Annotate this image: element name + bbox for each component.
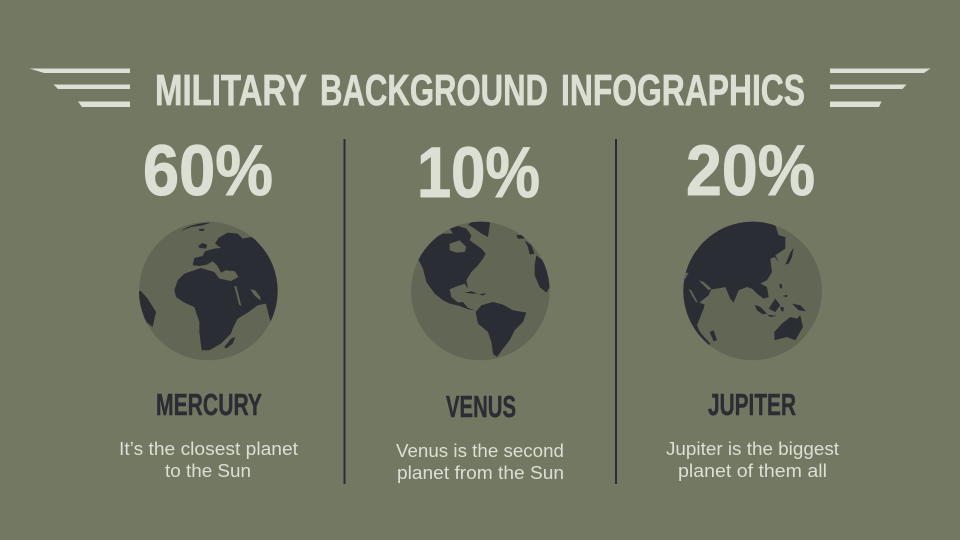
column divider right	[615, 139, 617, 484]
panel: jupiter	[666, 132, 839, 481]
description: Jupiter	[666, 439, 839, 481]
label: Venus: VENUS	[446, 389, 516, 424]
icon: globe showing Asia and Australia	[675, 215, 822, 360]
description: Mercury: to the Sun	[165, 461, 251, 481]
icon: globe showing Africa and Europe	[136, 222, 284, 360]
column divider left	[344, 139, 346, 484]
description: Mercury	[119, 439, 298, 481]
description: Mercury: It’s the closest planet	[119, 439, 298, 459]
label: Mercury: MERCURY	[156, 387, 262, 422]
panel: mercury	[119, 132, 298, 481]
description: Jupiter: Jupiter is the biggest	[666, 439, 839, 459]
title: BACKGROUND	[320, 66, 548, 115]
panel: venus	[396, 134, 564, 483]
title: INFOGRAPHICS	[561, 66, 805, 115]
percentage: 60%: 60%	[143, 132, 273, 211]
icon: globe showing the Americas	[411, 219, 553, 360]
percentage: 10%: 10%	[417, 134, 540, 213]
percentage: 20%: 20%	[686, 132, 815, 211]
description: Venus: planet from the Sun	[397, 463, 564, 483]
title	[155, 66, 805, 115]
left wing stripes	[30, 68, 130, 107]
label: Jupiter: JUPITER	[708, 387, 796, 422]
description: Jupiter: planet of them all	[678, 461, 827, 481]
description: Venus	[396, 441, 564, 483]
title: MILITARY	[155, 66, 307, 115]
description: Venus: Venus is the second	[396, 441, 564, 461]
right wing stripes	[830, 68, 930, 107]
